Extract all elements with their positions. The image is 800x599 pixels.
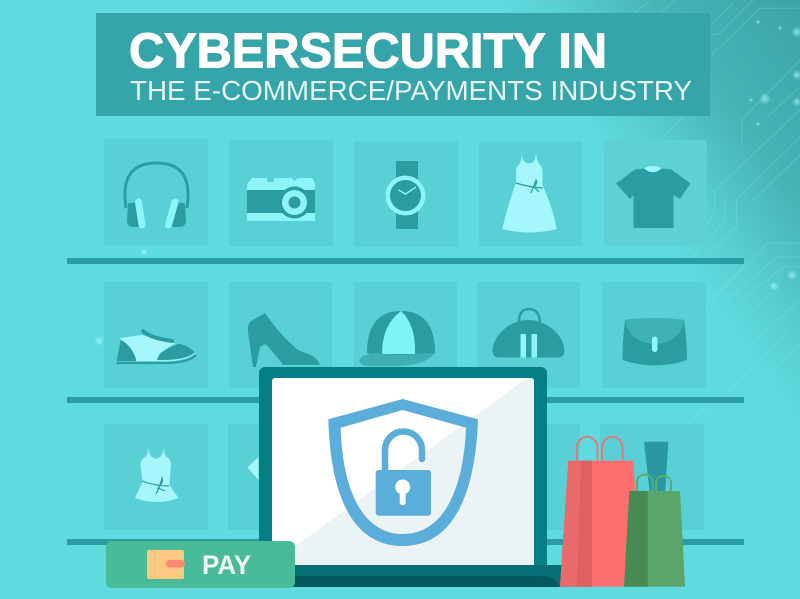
icon: boxed product behind bags (644, 442, 668, 495)
icon: wallet (147, 550, 185, 579)
shelves (67, 258, 744, 545)
icon: sneaker (117, 331, 196, 363)
icon: high heel (248, 313, 320, 367)
icon: watch (386, 161, 426, 229)
icon: cap (359, 311, 435, 366)
product tiles (104, 139, 707, 530)
laptop screen (272, 378, 534, 568)
pay button (106, 541, 295, 588)
title banner (96, 13, 710, 116)
icon: purse (622, 318, 687, 366)
icon: t-shirt (616, 166, 690, 228)
icon: partly hidden item (248, 457, 258, 480)
pay label: PAY (202, 550, 251, 580)
icon: dress (502, 153, 557, 232)
icon: headphones (125, 163, 188, 227)
red shopping bag (560, 437, 641, 587)
subtitle: THE E-COMMERCE/PAYMENTS INDUSTRY (130, 75, 692, 106)
laptop lid (259, 367, 547, 572)
icon: shield with open padlock (328, 399, 478, 546)
green shopping bag (624, 475, 685, 587)
icon: top (135, 448, 178, 502)
icon: camera (247, 178, 315, 221)
laptop base (285, 565, 562, 587)
laptop (259, 367, 562, 587)
icon: duffel bag (492, 309, 564, 358)
title: cybersecurity in: CYBERSECURITY IN (129, 24, 607, 78)
